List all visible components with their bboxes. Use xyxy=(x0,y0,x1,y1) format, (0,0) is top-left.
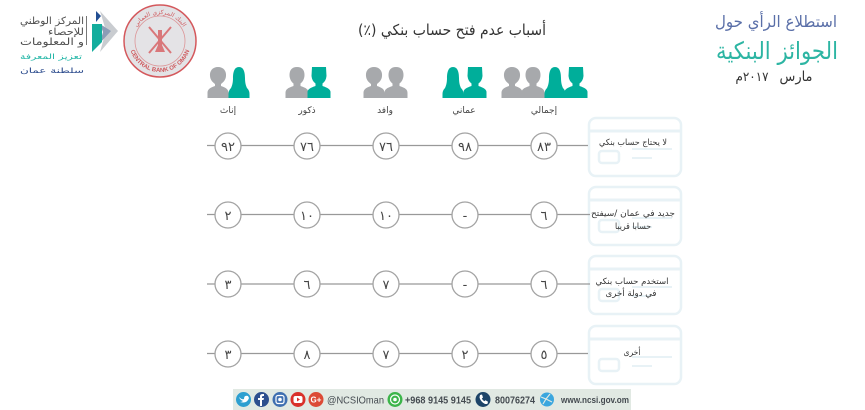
column: total: إجمالي xyxy=(531,106,557,116)
card xyxy=(589,256,681,314)
icon: google plus xyxy=(308,392,324,407)
icon: facebook xyxy=(254,392,269,407)
card xyxy=(589,326,681,384)
card xyxy=(589,118,681,176)
values xyxy=(215,133,557,159)
row 3: uses account in another country: ٣ xyxy=(225,278,232,293)
NCSI logo text: تعزيز المعرفة xyxy=(20,52,82,61)
values xyxy=(215,271,557,297)
Central Bank of Oman seal: CENTRAL BANK OF OMAN xyxy=(131,49,190,72)
NCSI logo mark xyxy=(92,11,118,52)
survey date: ٢٠١٧م xyxy=(736,70,769,85)
reason: استخدم حساب بنكي xyxy=(596,277,668,287)
survey date: مارس xyxy=(780,69,812,85)
column: Omani xyxy=(442,67,486,116)
Central Bank of Oman seal xyxy=(123,4,197,78)
row 2: new in Oman: ٦ xyxy=(541,209,548,224)
column: expatriate xyxy=(364,67,408,116)
row 3: uses account in another country xyxy=(207,256,681,314)
icon: instagram xyxy=(272,392,288,407)
reason: أخرى xyxy=(624,346,640,358)
row 1: no need for account: ٨٣ xyxy=(537,140,551,155)
column: expatriate: وافد xyxy=(377,106,393,116)
row 1: no need for account: ٩٢ xyxy=(221,140,235,155)
report heading xyxy=(715,11,838,85)
website: www.ncsi.gov.om xyxy=(560,395,629,406)
NCSI logo text: و المعلومات xyxy=(20,37,84,48)
toll-free number: 80076274 xyxy=(495,394,535,406)
NCSI logo text xyxy=(20,16,87,75)
row 4: other: ٥ xyxy=(541,348,548,363)
row 1: no need for account: ٧٦ xyxy=(379,140,393,155)
reason: حسابا قريبا xyxy=(615,222,651,232)
NCSI logo text: للإحصاء xyxy=(48,27,84,38)
reason: لا يحتاج حساب بنكي xyxy=(599,138,667,148)
column headers xyxy=(208,67,588,116)
footer contact bar xyxy=(233,389,631,410)
row 4: other: ٣ xyxy=(225,348,232,363)
icon: google plus: G+ xyxy=(311,396,322,404)
row 2: new in Oman: - xyxy=(463,209,468,224)
row 3: uses account in another country: ٧ xyxy=(383,278,390,293)
row 4: other: ٧ xyxy=(383,348,390,363)
row 1: no need for account: ٧٦ xyxy=(300,140,314,155)
row 1: no need for account: ٩٨ xyxy=(458,140,472,155)
survey date xyxy=(736,69,812,85)
values xyxy=(215,202,557,228)
column: females xyxy=(208,67,250,116)
row 2: new in Oman: ١٠ xyxy=(379,209,393,224)
row 1: no need for account xyxy=(207,118,681,176)
row 3: uses account in another country: - xyxy=(463,278,468,293)
row 3: uses account in another country: ٦ xyxy=(304,278,311,293)
NCSI logo xyxy=(20,11,118,75)
title: أسباب عدم فتح حساب بنكي (٪) xyxy=(358,20,546,40)
card xyxy=(589,187,681,245)
icon: whatsapp xyxy=(388,392,402,407)
column: females: إناث xyxy=(220,106,236,116)
row 4: other: ٨ xyxy=(304,348,311,363)
reason xyxy=(591,209,675,232)
NCSI logo text: المركز الوطني xyxy=(20,16,84,27)
column: males: ذكور xyxy=(297,106,316,116)
icon: phone xyxy=(476,392,490,407)
row 4: other: ٢ xyxy=(462,348,469,363)
whatsapp number: +968 9145 9145 xyxy=(405,394,471,406)
survey subject: الجوائز البنكية xyxy=(716,37,838,65)
social handle: @NCSIOman xyxy=(327,394,384,406)
reason: في دولة أخرى xyxy=(606,287,656,299)
row 2: new in Oman: ٢ xyxy=(225,209,232,224)
icon: youtube xyxy=(290,392,306,407)
NCSI logo text: سلطنة عمان xyxy=(20,66,84,75)
row 3: uses account in another country: ٦ xyxy=(541,278,548,293)
row 2: new in Oman xyxy=(207,187,681,245)
row 4: other xyxy=(207,326,681,384)
values xyxy=(215,341,557,367)
survey label: استطلاع الرأي حول xyxy=(715,11,837,32)
Central Bank of Oman seal: البنك المركزي العماني xyxy=(136,10,187,27)
column: total xyxy=(502,67,588,116)
icon: twitter xyxy=(236,392,251,407)
reason xyxy=(596,277,668,299)
column: males xyxy=(286,67,330,116)
icon: globe xyxy=(540,392,554,406)
column: Omani: عماني xyxy=(452,106,476,116)
reason: جديد في عمان /سيفتح xyxy=(591,209,675,219)
row 2: new in Oman: ١٠ xyxy=(300,209,314,224)
